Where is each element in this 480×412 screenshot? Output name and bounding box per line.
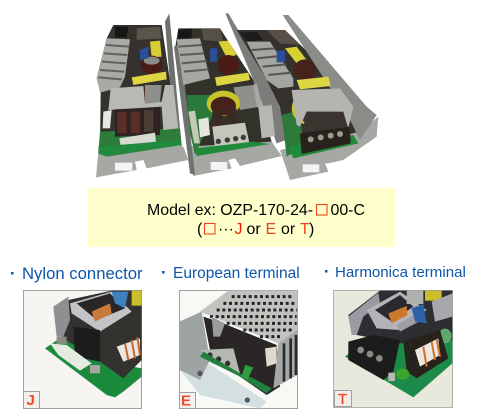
options text: ) xyxy=(309,221,314,238)
label T: T xyxy=(338,391,347,408)
options text: or xyxy=(281,221,296,238)
model example text: Model ex: OZP-170-24- xyxy=(147,202,313,219)
label E: E xyxy=(181,392,191,410)
heading: European terminal: European terminal xyxy=(173,265,300,282)
options text: E xyxy=(266,221,276,238)
label J: J xyxy=(26,392,35,409)
options text: ··· xyxy=(218,221,234,238)
options text: J xyxy=(234,221,242,238)
heading: Nylon connector: Nylon connector xyxy=(22,264,143,283)
unit 2: European terminal xyxy=(174,13,286,176)
model example text: 00-C xyxy=(330,202,365,219)
unit 3: Harmonica terminal xyxy=(237,15,378,180)
options text: ( xyxy=(197,221,203,238)
options text: T xyxy=(300,221,310,238)
photo panel: J nylon connector xyxy=(24,290,142,409)
photo panel: T Harmonica terminal xyxy=(334,290,452,408)
options placeholder square xyxy=(204,224,215,234)
photo panel: E European terminal xyxy=(179,290,298,410)
placeholder square xyxy=(316,204,327,215)
model example box xyxy=(88,188,395,247)
unit 1: nylon connector xyxy=(96,13,188,177)
options text: or xyxy=(246,221,261,238)
heading: Harmonica terminal: Harmonica terminal xyxy=(335,264,466,281)
product photo: three power supply units xyxy=(96,13,378,180)
